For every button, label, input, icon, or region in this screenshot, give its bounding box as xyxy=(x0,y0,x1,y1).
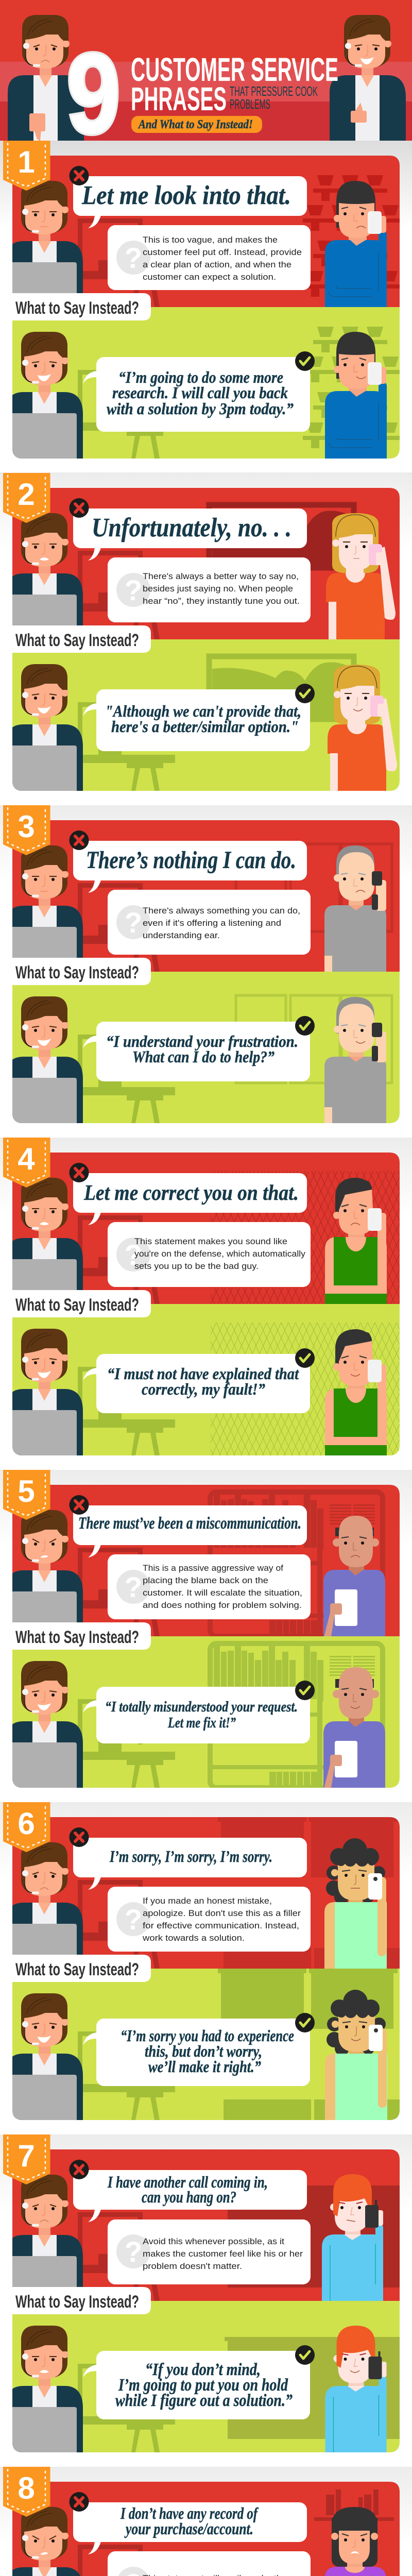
right phrase bubble: "Although we can't provide that, xyxy=(105,702,301,720)
right scene xyxy=(12,1636,400,1788)
explanation bubble: There's always something you can do, xyxy=(143,906,300,916)
wrong scene xyxy=(7,2482,400,2576)
wrong phrase bubble xyxy=(73,1838,307,1890)
icon: right xyxy=(295,2345,315,2365)
explanation bubble xyxy=(108,1554,311,1619)
subtitle: PROBLEMS xyxy=(230,96,270,112)
explanation bubble xyxy=(108,1887,311,1952)
explanation bubble: This is too vague, and makes the xyxy=(143,235,278,245)
header agent: unhappy with thumbs down xyxy=(8,15,84,141)
wrong phrase bubble: I’m sorry, I’m sorry, I’m sorry. xyxy=(109,1847,272,1866)
badge 6 xyxy=(3,1802,50,1852)
right scene xyxy=(12,1304,400,1455)
wrong phrase bubble xyxy=(73,1173,307,1225)
panel: phrase 1 xyxy=(0,141,412,486)
panel: phrase 7 xyxy=(0,2134,412,2480)
header banner xyxy=(0,0,412,141)
wrong scene xyxy=(12,820,400,972)
wrong phrase bubble xyxy=(73,509,307,561)
explanation bubble: problem doesn't matter. xyxy=(143,2261,242,2271)
panel: phrase 5 xyxy=(0,1470,412,1816)
explanation bubble: customer can expect a solution. xyxy=(143,272,276,282)
what to say tab xyxy=(12,625,151,653)
right scene xyxy=(12,639,400,791)
icon: wrong xyxy=(69,498,89,518)
explanation bubble: and does nothing for problem solving. xyxy=(143,1600,302,1610)
wrong phrase bubble: Unfortunately, no. . . xyxy=(92,513,291,543)
badge 2: 2 xyxy=(18,477,35,512)
explanation bubble xyxy=(108,1222,311,1287)
panel: phrase 6 xyxy=(0,1802,412,2148)
badge 6: 6 xyxy=(18,1806,35,1841)
what to say tab xyxy=(12,2287,151,2314)
badge 3 xyxy=(3,805,50,855)
wrong phrase bubble xyxy=(73,841,307,893)
icon: wrong xyxy=(69,831,89,850)
right phrase bubble: What can I do to help?” xyxy=(132,1047,274,1066)
explanation bubble: customer feel put off. Instead, provide xyxy=(143,247,302,257)
what to say tab xyxy=(12,958,151,985)
wrong phrase bubble: Let me look into that. xyxy=(81,181,291,210)
wrong scene xyxy=(12,156,400,307)
wrong phrase bubble: I have another call coming in, xyxy=(107,2173,268,2191)
number badges xyxy=(3,141,50,2576)
orange ribbon: And What to Say Instead! xyxy=(138,118,253,131)
badge 2 xyxy=(3,473,50,523)
right phrase bubble xyxy=(83,689,310,751)
wrong phrase bubble: your purchase/account. xyxy=(124,2519,253,2538)
icon: wrong xyxy=(69,2160,89,2179)
right phrase bubble: “If you don’t mind, xyxy=(145,2360,261,2379)
explanation bubble: even if it's offering a listening and xyxy=(143,918,281,928)
badge 8: 8 xyxy=(18,2471,35,2505)
right phrase bubble: “I’m going to do some more xyxy=(118,368,283,386)
right phrase bubble: with a solution by 3pm today.” xyxy=(107,399,294,418)
badge 7: 7 xyxy=(18,2139,35,2173)
icon: wrong xyxy=(69,166,89,185)
icon: wrong xyxy=(69,1163,89,1182)
right scene xyxy=(12,307,400,459)
header agent: happy with thumbs up xyxy=(330,15,406,141)
what to say tab xyxy=(12,1290,151,1317)
wrong scene xyxy=(12,2149,400,2301)
what to say tab xyxy=(12,293,151,320)
explanation bubble: understanding ear. xyxy=(143,930,220,940)
right phrase bubble xyxy=(83,1354,310,1413)
explanation bubble: makes the customer feel like his or her xyxy=(143,2249,303,2259)
explanation bubble: There's always a better way to say no, xyxy=(143,571,299,581)
panel: phrase 2 xyxy=(0,472,412,819)
explanation bubble: hear “no”, they instantly tune you out. xyxy=(143,596,300,606)
right scene xyxy=(12,972,400,1123)
wrong phrase bubble xyxy=(73,176,307,228)
explanation bubble xyxy=(108,890,311,955)
what to say tab xyxy=(12,1622,151,1650)
badge 1: 1 xyxy=(18,145,35,179)
right phrase bubble: we’ll make it right.” xyxy=(148,2057,261,2076)
what to say tab: What to Say Instead? xyxy=(15,298,139,318)
right phrase bubble: Let me fix it!” xyxy=(167,1715,236,1731)
icon: right xyxy=(295,1016,315,1036)
what to say tab: What to Say Instead? xyxy=(15,1295,139,1315)
explanation bubble: This statement makes you sound like xyxy=(134,1236,287,1246)
icon: right xyxy=(295,684,315,703)
explanation bubble xyxy=(108,557,311,622)
panel: phrase 3 xyxy=(0,805,412,1151)
wrong phrase bubble: I don’t have any record of xyxy=(120,2504,259,2522)
explanation bubble xyxy=(108,225,311,290)
wrong phrase bubble xyxy=(73,2170,307,2222)
title line 2: PHRASES xyxy=(131,80,227,117)
explanation bubble xyxy=(108,2551,311,2576)
explanation bubble: besides just saying no. When people xyxy=(143,584,293,594)
what to say tab: What to Say Instead? xyxy=(15,963,139,982)
right scene xyxy=(12,2301,400,2452)
explanation bubble: placing the blame back on the xyxy=(143,1575,268,1585)
wrong phrase bubble: Let me correct you on that. xyxy=(83,1181,299,1205)
right phrase bubble: I’m going to put you on hold xyxy=(118,2376,288,2395)
icon: right xyxy=(295,1681,315,1700)
icon: right xyxy=(295,351,315,371)
right phrase bubble: “I must not have explained that xyxy=(107,1364,299,1383)
right phrase bubble: here's a better/similar option." xyxy=(111,717,299,736)
what to say tab: What to Say Instead? xyxy=(15,631,139,650)
icon: wrong xyxy=(69,2492,89,2512)
wrong scene xyxy=(12,1485,400,1636)
wrong phrase bubble: There’s nothing I can do. xyxy=(86,846,296,874)
wrong phrase bubble: There must’ve been a miscommunication. xyxy=(78,1514,301,1533)
right phrase bubble: correctly, my fault!” xyxy=(142,1380,265,1398)
explanation bubble xyxy=(108,2219,311,2284)
icon: right xyxy=(295,2013,315,2032)
right phrase bubble: this, but don’t worry, xyxy=(145,2042,262,2060)
right phrase bubble xyxy=(83,2351,310,2419)
right phrase bubble xyxy=(83,1022,310,1081)
badge 4: 4 xyxy=(18,1142,35,1176)
big number 9: 9 xyxy=(66,30,121,158)
panel: phrase 8 xyxy=(0,2467,412,2576)
explanation bubble: If you made an honest mistake, xyxy=(143,1896,272,1906)
explanation bubble: work towards a solution. xyxy=(142,1933,245,1943)
right phrase bubble xyxy=(83,1687,310,1743)
explanation bubble: This is a passive aggressive way of xyxy=(143,1563,283,1573)
right phrase bubble: while I figure out a solution.” xyxy=(115,2391,293,2410)
subtitle xyxy=(230,83,318,112)
what to say tab: What to Say Instead? xyxy=(15,2292,139,2312)
badge 3: 3 xyxy=(18,809,35,844)
badge 4 xyxy=(3,1138,50,1188)
right phrase bubble xyxy=(83,2019,310,2086)
what to say tab xyxy=(12,1955,151,1982)
badge 5: 5 xyxy=(18,1474,35,1509)
right phrase bubble: “I totally misunderstood your request. xyxy=(105,1699,298,1715)
wrong phrase bubble: can you hang on? xyxy=(142,2188,236,2206)
explanation bubble: a clear plan of action, and when the xyxy=(143,260,291,269)
explanation bubble: apologize. But don't use this as a filler xyxy=(143,1908,301,1918)
icon: wrong xyxy=(69,1827,89,1847)
right scene xyxy=(12,1969,400,2120)
right phrase bubble: research. I will call you back xyxy=(112,383,288,402)
badge 1 xyxy=(3,141,50,191)
what to say tab: What to Say Instead? xyxy=(15,1960,139,1979)
explanation bubble: Avoid this whenever possible, as it xyxy=(143,2236,284,2246)
badge 7 xyxy=(3,2134,50,2184)
right phrase bubble: “I’m sorry you had to experience xyxy=(121,2026,294,2045)
icon: right xyxy=(295,1348,315,1368)
explanation bubble: sets you up to be the bad guy. xyxy=(134,1261,259,1271)
icon: wrong xyxy=(69,1495,89,1515)
panel: phrase 4 xyxy=(0,1138,412,1483)
explanation bubble: customer. It will escalate the situation, xyxy=(143,1588,302,1598)
wrong scene xyxy=(12,1153,400,1304)
what to say tab: What to Say Instead? xyxy=(15,1628,139,1647)
right phrase bubble xyxy=(83,357,310,432)
badge 8 xyxy=(3,2467,50,2517)
subtitle: THAT PRESSURE COOK xyxy=(230,83,318,99)
wrong phrase bubble xyxy=(73,2502,307,2554)
wrong phrase bubble xyxy=(73,1505,307,1557)
explanation bubble: for effective communication. Instead, xyxy=(143,1921,299,1930)
badge 5 xyxy=(3,1470,50,1520)
wrong scene xyxy=(12,1817,400,1969)
wrong scene xyxy=(12,488,400,639)
explanation bubble: you're on the defense, which automatically xyxy=(134,1249,306,1259)
right phrase bubble: “I understand your frustration. xyxy=(106,1032,298,1050)
